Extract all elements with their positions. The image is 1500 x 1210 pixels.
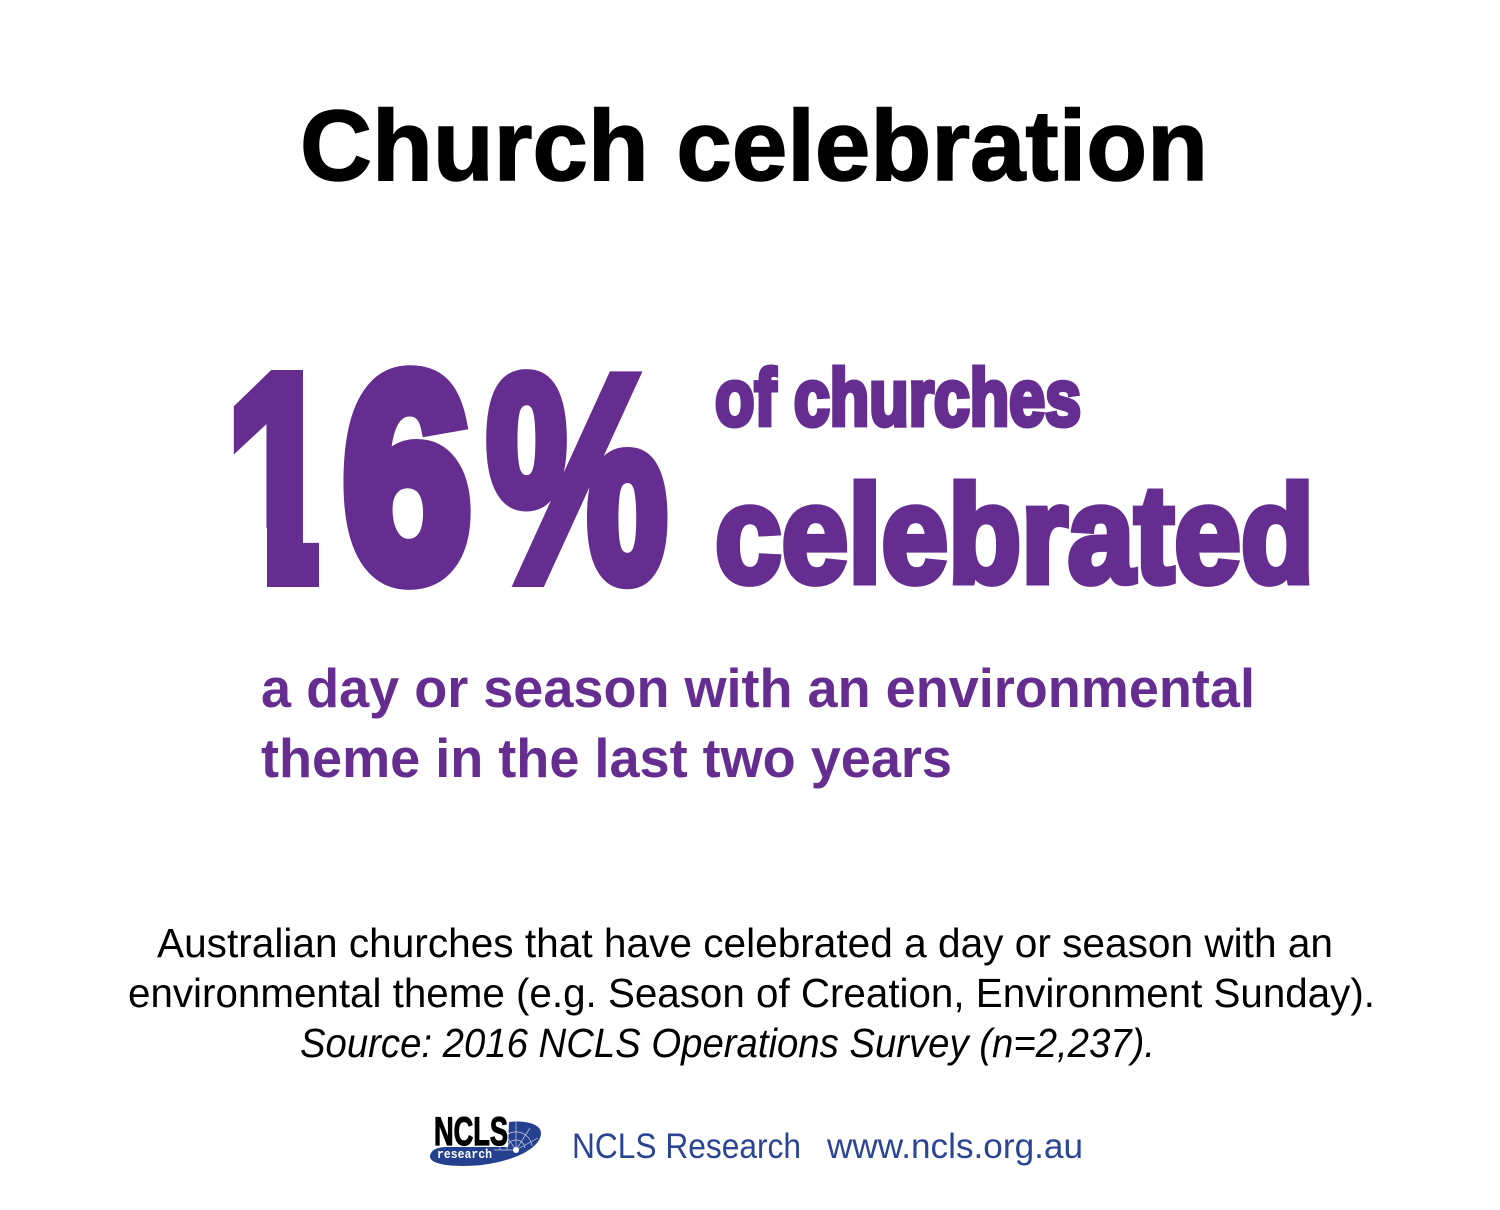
big statistic: 16%: % [486, 316, 668, 643]
big statistic: 16%: 6 [343, 316, 471, 639]
icon: NCLS research logo: research [437, 1147, 492, 1162]
subheading [261, 657, 1255, 789]
big statistic: 16% [200, 313, 668, 643]
subheading: a day or season with an environmental [261, 657, 1255, 719]
icon: NCLS research logo: NCLS [434, 1110, 508, 1154]
description and source: environmental theme (e.g. Season of Creation, Environment Sunday). [128, 970, 1375, 1016]
description and source: Source: 2016 NCLS Operations Survey (n=2,237). [300, 1020, 1155, 1066]
footer: website: www.ncls.org.au [826, 1127, 1083, 1166]
footer: organisation name: NCLS Research [572, 1127, 801, 1166]
callout: of churches: of churches [715, 353, 1081, 442]
big statistic: 16%: 1 [225, 313, 335, 643]
description and source [128, 920, 1375, 1066]
title: Church celebration [300, 90, 1208, 202]
description and source: Australian churches that have celebrated a day or season with an [157, 920, 1333, 966]
callout: celebrated: celebrated [715, 458, 1314, 612]
subheading: theme in the last two years [261, 727, 952, 789]
